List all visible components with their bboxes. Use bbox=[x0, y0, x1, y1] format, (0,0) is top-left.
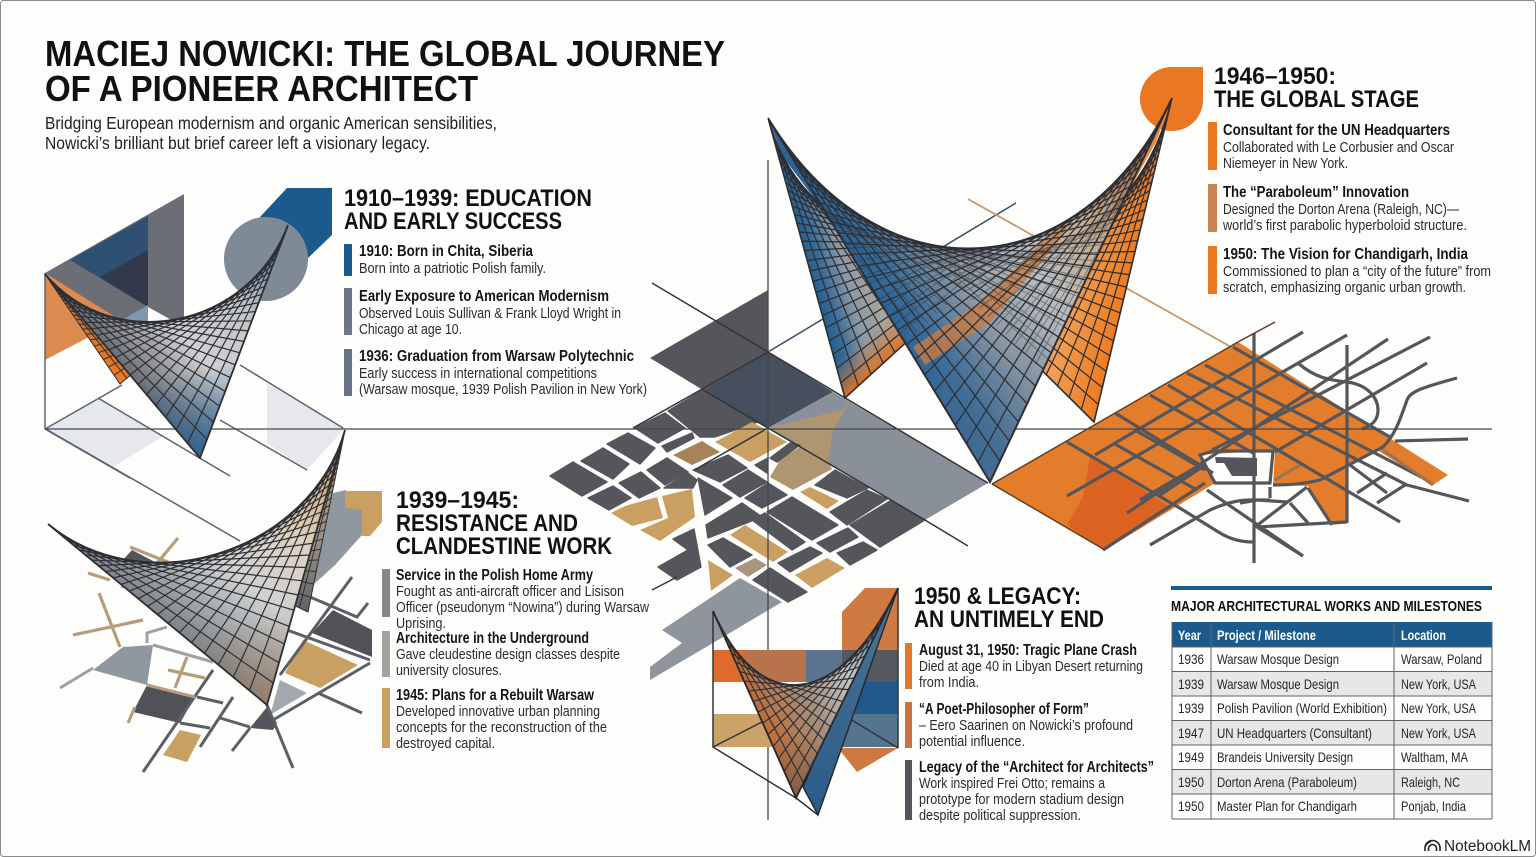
brown band bbox=[713, 650, 806, 682]
right gap filler bbox=[1125, 98, 1172, 195]
orange band tip bbox=[713, 650, 745, 682]
construction lines bbox=[713, 588, 898, 815]
orange seal shape bbox=[1140, 67, 1203, 131]
blue hexagon bbox=[260, 188, 332, 258]
tan block bbox=[285, 640, 358, 688]
back right sheet bbox=[1043, 100, 1172, 424]
pale floor plane left bbox=[47, 398, 162, 467]
white notch bbox=[148, 307, 175, 327]
hyperbolic paraboloid: early years form bbox=[40, 225, 322, 482]
bar: paraboleum bbox=[1208, 184, 1217, 232]
heading: CLANDESTINE WORK bbox=[396, 533, 613, 560]
dark lower block bbox=[133, 685, 195, 723]
axis lines bbox=[45, 160, 1492, 820]
grey blue band bbox=[806, 650, 898, 682]
hyperbolic paraboloid: main Dorton form bbox=[767, 98, 1173, 484]
item: legacy: Work inspired Frei Otto; remains a bbox=[919, 776, 1106, 792]
orange site plane bbox=[992, 342, 1448, 550]
dark apex wedge bbox=[250, 707, 277, 730]
orange plane bbox=[45, 273, 120, 360]
dark inset triangle bbox=[100, 250, 148, 307]
item: Chandigarh: Commissioned to plan a “city of the future” from bbox=[1223, 264, 1491, 280]
site edges bbox=[992, 322, 1275, 550]
back meshes seen through the front sheet bbox=[783, 138, 1162, 408]
tan overlay bbox=[768, 402, 850, 490]
back sheet bbox=[200, 430, 380, 677]
item: legacy bbox=[919, 759, 1154, 824]
illustration: left hypar scene, early years bbox=[45, 188, 345, 541]
item: Chandigarh bbox=[1223, 246, 1491, 296]
heading: 1939–1945: bbox=[396, 487, 519, 514]
heading bbox=[1214, 63, 1419, 113]
front sheet fill bbox=[768, 98, 1192, 492]
dark plane bbox=[650, 290, 768, 390]
grey triangular plane bbox=[45, 194, 184, 327]
item: UN bbox=[1223, 122, 1454, 172]
bar: graduation bbox=[344, 349, 352, 396]
item: home army: Service in the Polish Home Army bbox=[396, 567, 593, 584]
tan rule bbox=[968, 199, 1240, 352]
heading: AN UNTIMELY END bbox=[914, 606, 1104, 633]
heading: RESISTANCE AND bbox=[396, 510, 578, 537]
grey plaza bbox=[93, 645, 153, 685]
back sheets bbox=[768, 100, 1172, 424]
dark streets bbox=[143, 577, 370, 772]
dark band end bbox=[842, 650, 898, 682]
item: rebuilt warsaw: 1945: Plans for a Rebuilt Warsaw bbox=[396, 687, 595, 704]
table rows bbox=[1172, 622, 1492, 819]
item: rebuilt warsaw: destroyed capital. bbox=[396, 736, 495, 752]
item: exposure: Observed Louis Sullivan & Frank Lloyd Wright in bbox=[359, 306, 621, 322]
heading bbox=[914, 583, 1104, 633]
deep blue band bbox=[840, 682, 898, 714]
bar: born bbox=[344, 244, 352, 276]
panel: legacy bbox=[905, 583, 1154, 824]
item: graduation: (Warsaw mosque, 1939 Polish Pavilion in New York) bbox=[359, 382, 647, 398]
item: poet: “A Poet-Philosopher of Form” bbox=[919, 701, 1089, 718]
heading: 1910–1939: EDUCATION bbox=[344, 185, 592, 212]
item: graduation: Early success in international competitions bbox=[359, 366, 597, 382]
item: UN: Consultant for the UN Headquarters bbox=[1223, 122, 1450, 139]
hyperbolic paraboloid: resistance form bbox=[48, 430, 416, 752]
item: home army bbox=[396, 567, 649, 632]
item: crash: August 31, 1950: Tragic Plane Crash bbox=[919, 642, 1137, 659]
table rows: Dorton Arena (Paraboleum) bbox=[1217, 774, 1357, 790]
item: underground: Gave cleudestine design classes despite bbox=[396, 647, 620, 663]
tan band bbox=[713, 714, 773, 747]
table rows: Warsaw, Poland bbox=[1401, 651, 1482, 667]
item: paraboleum: world’s first parabolic hyperboloid structure. bbox=[1222, 218, 1467, 234]
table rows: 1949 bbox=[1178, 749, 1204, 765]
small tan block bbox=[163, 730, 201, 762]
item: underground bbox=[396, 630, 620, 679]
item: poet: potential influence. bbox=[919, 734, 1025, 750]
item: exposure: Chicago at age 10. bbox=[359, 322, 462, 338]
left gap filler bbox=[768, 118, 819, 202]
table header: Year bbox=[1178, 627, 1201, 643]
grey diagonal plane bbox=[768, 392, 988, 520]
heading: THE GLOBAL STAGE bbox=[1214, 86, 1419, 113]
table rows: Warsaw Mosque Design bbox=[1217, 651, 1339, 667]
table header bbox=[1172, 622, 1492, 647]
front sheet bbox=[45, 225, 322, 482]
orange back sheet bbox=[40, 274, 205, 403]
heading bbox=[344, 185, 592, 235]
dark block bbox=[312, 610, 372, 657]
bar: underground bbox=[382, 631, 390, 677]
table rows: 1939 bbox=[1178, 700, 1204, 716]
heading: 1946–1950: bbox=[1214, 63, 1336, 90]
table rows: 1947 bbox=[1178, 725, 1204, 741]
NotebookLM badge: NotebookLM bbox=[1444, 838, 1531, 855]
item: poet: – Eero Saarinen on Nowicki’s profound bbox=[919, 718, 1133, 734]
panel: the global stage bbox=[1208, 63, 1491, 296]
title: OF A PIONEER ARCHITECT bbox=[45, 68, 478, 109]
central plaza bbox=[1215, 457, 1257, 476]
front sheet bbox=[48, 430, 416, 752]
item: graduation: 1936: Graduation from Warsaw Polytechnic bbox=[359, 348, 634, 365]
table header: Project / Milestone bbox=[1217, 627, 1316, 643]
table rows: Polish Pavilion (World Exhibition) bbox=[1217, 700, 1387, 716]
item: home army: Fought as anti-aircraft officer and Lisison bbox=[396, 584, 624, 600]
front sheet mesh bbox=[768, 98, 1192, 492]
item: UN: Collaborated with Le Corbusier and Oscar bbox=[1223, 140, 1454, 156]
road network bbox=[1067, 332, 1469, 563]
item: rebuilt warsaw: Developed innovative urban planning bbox=[396, 704, 600, 720]
grey circle bbox=[224, 217, 308, 301]
panel: resistance and clandestine work bbox=[382, 487, 649, 752]
subtitle bbox=[45, 113, 497, 153]
deep orange sector bbox=[1067, 457, 1172, 550]
hyperbolic paraboloid: legacy form bbox=[704, 588, 898, 810]
blue inset plane bbox=[70, 216, 148, 307]
bar: home army bbox=[382, 569, 390, 617]
table rows: 1950 bbox=[1178, 774, 1204, 790]
table rows: Warsaw Mosque Design bbox=[1217, 676, 1339, 692]
item: exposure: Early Exposure to American Modernism bbox=[359, 288, 609, 305]
dark street blocks bbox=[550, 390, 925, 602]
faded roads bbox=[1275, 450, 1433, 485]
table rows: New York, USA bbox=[1401, 700, 1477, 716]
illustration: central street map and planes bbox=[550, 199, 1240, 680]
blue flap bbox=[803, 588, 898, 815]
item: Chandigarh: scratch, emphasizing organic urban growth. bbox=[1223, 280, 1466, 296]
bar: rebuilt warsaw bbox=[382, 688, 390, 748]
bar: poet bbox=[905, 702, 912, 748]
title bbox=[45, 33, 725, 109]
table rows: UN Headquarters (Consultant) bbox=[1217, 725, 1372, 741]
bar: Chandigarh bbox=[1208, 246, 1217, 294]
title: MACIEJ NOWICKI: THE GLOBAL JOURNEY bbox=[45, 33, 725, 74]
bar: crash bbox=[905, 643, 912, 689]
orange lower wedge bbox=[838, 748, 898, 772]
table rows: Raleigh, NC bbox=[1401, 774, 1460, 790]
dark upper block bbox=[120, 550, 155, 570]
back left sheet bbox=[768, 119, 905, 400]
item: paraboleum: The “Paraboleum” Innovation bbox=[1223, 184, 1409, 201]
pale floor plane right bbox=[267, 383, 345, 470]
table rows: Brandeis University Design bbox=[1217, 749, 1353, 765]
table rows: New York, USA bbox=[1401, 676, 1477, 692]
heading: AND EARLY SUCCESS bbox=[344, 208, 562, 235]
illustration: lower left city fragment bbox=[60, 490, 382, 772]
item: born: 1910: Born in Chita, Siberia bbox=[359, 243, 533, 260]
table header: Location bbox=[1401, 627, 1446, 643]
table rows: Master Plan for Chandigarh bbox=[1217, 798, 1357, 814]
table rows: 1950 bbox=[1178, 798, 1204, 814]
table top rule bbox=[1171, 586, 1492, 590]
item: paraboleum: Designed the Dorton Arena (Raleigh, NC)— bbox=[1223, 202, 1459, 218]
tan city blocks bbox=[611, 422, 845, 591]
icon: NotebookLM mark bbox=[1425, 841, 1440, 851]
heading bbox=[396, 487, 613, 560]
tan corner shape bbox=[345, 491, 382, 536]
bar: exposure bbox=[344, 288, 352, 335]
illustration: legacy colour planes bbox=[713, 588, 898, 815]
panel: major works table bbox=[1171, 586, 1492, 819]
item: underground: Architecture in the Underground bbox=[396, 630, 589, 647]
panel: education and early success bbox=[344, 185, 647, 398]
subtitle: Bridging European modernism and organic American sensibilities, bbox=[45, 113, 497, 133]
item: exposure bbox=[359, 288, 621, 338]
illustration: orange Chandigarh plan bbox=[992, 67, 1469, 563]
grey blue lower band bbox=[840, 714, 898, 747]
item: poet bbox=[919, 701, 1133, 750]
item: born bbox=[359, 243, 546, 277]
grey plane bbox=[303, 490, 362, 585]
light grey wedge bbox=[270, 680, 307, 715]
grey lower plane bbox=[650, 578, 782, 680]
item: underground: university closures. bbox=[396, 663, 502, 679]
item: crash bbox=[919, 642, 1143, 691]
grey streets bbox=[60, 570, 213, 688]
bar: legacy bbox=[905, 760, 912, 820]
item: legacy: Legacy of the “Architect for Architects” bbox=[919, 759, 1154, 776]
bar: UN bbox=[1208, 122, 1217, 170]
table rows: 1936 bbox=[1178, 651, 1204, 667]
item: home army: Officer (pseudonym “Nowina”) during Warsaw bbox=[396, 600, 649, 616]
item: crash: Died at age 40 in Libyan Desert returning bbox=[919, 659, 1143, 675]
item: crash: from India. bbox=[919, 675, 979, 691]
item: legacy: despite political suppression. bbox=[919, 808, 1081, 824]
orange crossing band bbox=[913, 222, 1070, 365]
heading: 1950 & LEGACY: bbox=[914, 583, 1081, 610]
pale blue facet bbox=[122, 305, 148, 327]
item: UN: Niemeyer in New York. bbox=[1223, 156, 1348, 172]
construction lines bbox=[45, 273, 343, 541]
table rows: New York, USA bbox=[1401, 725, 1477, 741]
item: home army: Uprising. bbox=[396, 616, 446, 632]
item: born: Born into a patriotic Polish family. bbox=[359, 261, 546, 277]
blue rule bbox=[768, 203, 1016, 352]
item: rebuilt warsaw bbox=[396, 687, 607, 752]
table rows: 1939 bbox=[1178, 676, 1204, 692]
item: paraboleum bbox=[1222, 184, 1467, 234]
blue-grey plane bbox=[703, 352, 833, 428]
orange upper plane bbox=[842, 588, 898, 650]
construction lines bbox=[633, 283, 988, 590]
table rows: Ponjab, India bbox=[1401, 798, 1466, 814]
item: Chandigarh: 1950: The Vision for Chandigarh, India bbox=[1223, 246, 1468, 263]
item: legacy: prototype for modern stadium design bbox=[919, 792, 1124, 808]
subtitle: Nowicki’s brilliant but brief career left a visionary legacy. bbox=[45, 133, 430, 153]
table rows: Waltham, MA bbox=[1401, 749, 1469, 765]
item: rebuilt warsaw: concepts for the reconstruction of the bbox=[396, 720, 607, 736]
item: graduation bbox=[359, 348, 647, 398]
tan streets bbox=[73, 538, 205, 723]
